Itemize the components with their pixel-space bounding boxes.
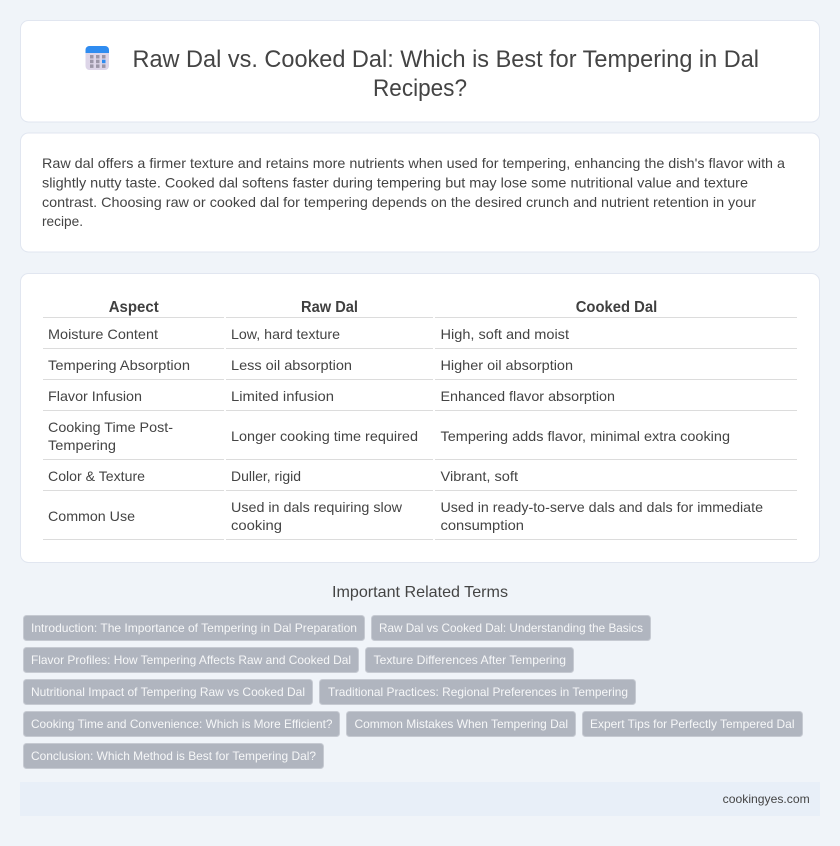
table row: cooking time post-tempering: Tempering adds flavor, minimal extra cooking [440, 428, 730, 444]
tag: common mistakes [346, 712, 576, 736]
title: Raw Dal vs. Cooked Dal: Which is Best for Tempering in Dal [132, 46, 759, 73]
table row: cooking time post-tempering: Tempering [48, 437, 116, 453]
table row: tempering absorption: Higher oil absorption [440, 357, 573, 373]
table row: common use [48, 499, 763, 533]
text block: introduction paragraph: recipe. [42, 213, 83, 229]
table row: tempering absorption: Less oil absorption [231, 357, 352, 373]
heading: important related terms: Important Related Terms [332, 584, 508, 601]
table row: moisture content [48, 326, 569, 342]
title: Recipes? [373, 75, 467, 102]
table header row: Aspect [109, 299, 159, 316]
table header row [109, 299, 657, 316]
title [132, 46, 759, 102]
panel: header [20, 20, 820, 122]
table row: flavor infusion: Enhanced flavor absorption [440, 388, 615, 404]
table row: flavor infusion: Flavor Infusion [48, 388, 142, 404]
table header row: Raw Dal [301, 299, 358, 316]
tag: introduction: Introduction: The Importance of Tempering in Dal Preparation [31, 621, 357, 635]
tag: conclusion [24, 744, 324, 768]
table row: color and texture: Color & Texture [48, 468, 145, 484]
panel: introduction [20, 133, 820, 252]
tag: nutritional impact [24, 680, 312, 704]
icon: calendar [86, 46, 109, 70]
tag: texture differences: Texture Differences After Tempering [374, 653, 566, 667]
tag: expert tips [582, 712, 802, 736]
tag: raw vs cooked basics [372, 616, 650, 640]
table row: cooking time post-tempering: Longer cooking time required [231, 428, 418, 444]
footer: cookingyes.com [723, 792, 810, 806]
table row: common use: Common Use [48, 508, 135, 524]
tag: expert tips: Expert Tips for Perfectly Tempered Dal [590, 717, 794, 731]
tag: flavor profiles: Flavor Profiles: How Tempering Affects Raw and Cooked Dal [31, 653, 351, 667]
tag: common mistakes: Common Mistakes When Tempering Dal [354, 717, 568, 731]
table row: moisture content: Moisture Content [48, 326, 158, 342]
table row: moisture content: High, soft and moist [440, 326, 569, 342]
table row: common use: consumption [440, 517, 524, 533]
panel: comparison table [20, 274, 820, 562]
text block: introduction paragraph: contrast. Choosing raw or cooked dal for tempering depends on the desired crunch and nutrient retention in your [42, 194, 756, 210]
table row: cooking time post-tempering [48, 419, 730, 453]
text block: introduction paragraph [42, 155, 785, 229]
table row: common use: Used in dals requiring slow [231, 499, 403, 515]
table row: tempering absorption: Tempering Absorption [48, 357, 190, 373]
table row: moisture content: Low, hard texture [231, 326, 340, 342]
tag: texture differences [366, 648, 574, 672]
related term tags [24, 616, 802, 768]
table row: color and texture [48, 468, 518, 484]
footer [20, 782, 820, 816]
table row: color and texture: Vibrant, soft [440, 468, 518, 484]
tag: conclusion: Conclusion: Which Method is Best for Tempering Dal? [31, 749, 316, 763]
text block: introduction paragraph: Raw dal offers a firmer texture and retains more nutrients when used for tempering, enhancing the dish's flavor with a [42, 155, 785, 171]
tag: flavor profiles [24, 648, 358, 672]
tag: nutritional impact: Nutritional Impact of Tempering Raw vs Cooked Dal [31, 685, 305, 699]
tag: traditional practices [320, 680, 636, 704]
tag: traditional practices: Traditional Practices: Regional Preferences in Tempering [328, 685, 628, 699]
table row: flavor infusion [48, 388, 615, 404]
text block: introduction paragraph: slightly nutty taste. Cooked dal softens faster during tempering but may lose some nutritional value and texture [42, 174, 748, 190]
tag: raw vs cooked basics: Raw Dal vs Cooked Dal: Understanding the Basics [379, 621, 643, 635]
tag: introduction [24, 616, 364, 640]
table row: tempering absorption [48, 357, 573, 373]
table row: color and texture: Duller, rigid [231, 468, 301, 484]
tag: cooking time: Cooking Time and Convenience: Which is More Efficient? [31, 717, 333, 731]
table header row: Cooked Dal [576, 299, 657, 316]
table row: cooking time post-tempering: Cooking Time Post- [48, 419, 173, 435]
tag: cooking time [24, 712, 340, 736]
table row: common use: cooking [231, 517, 282, 533]
table row: common use: Used in ready-to-serve dals and dals for immediate [440, 499, 763, 515]
table row: flavor infusion: Limited infusion [231, 388, 334, 404]
